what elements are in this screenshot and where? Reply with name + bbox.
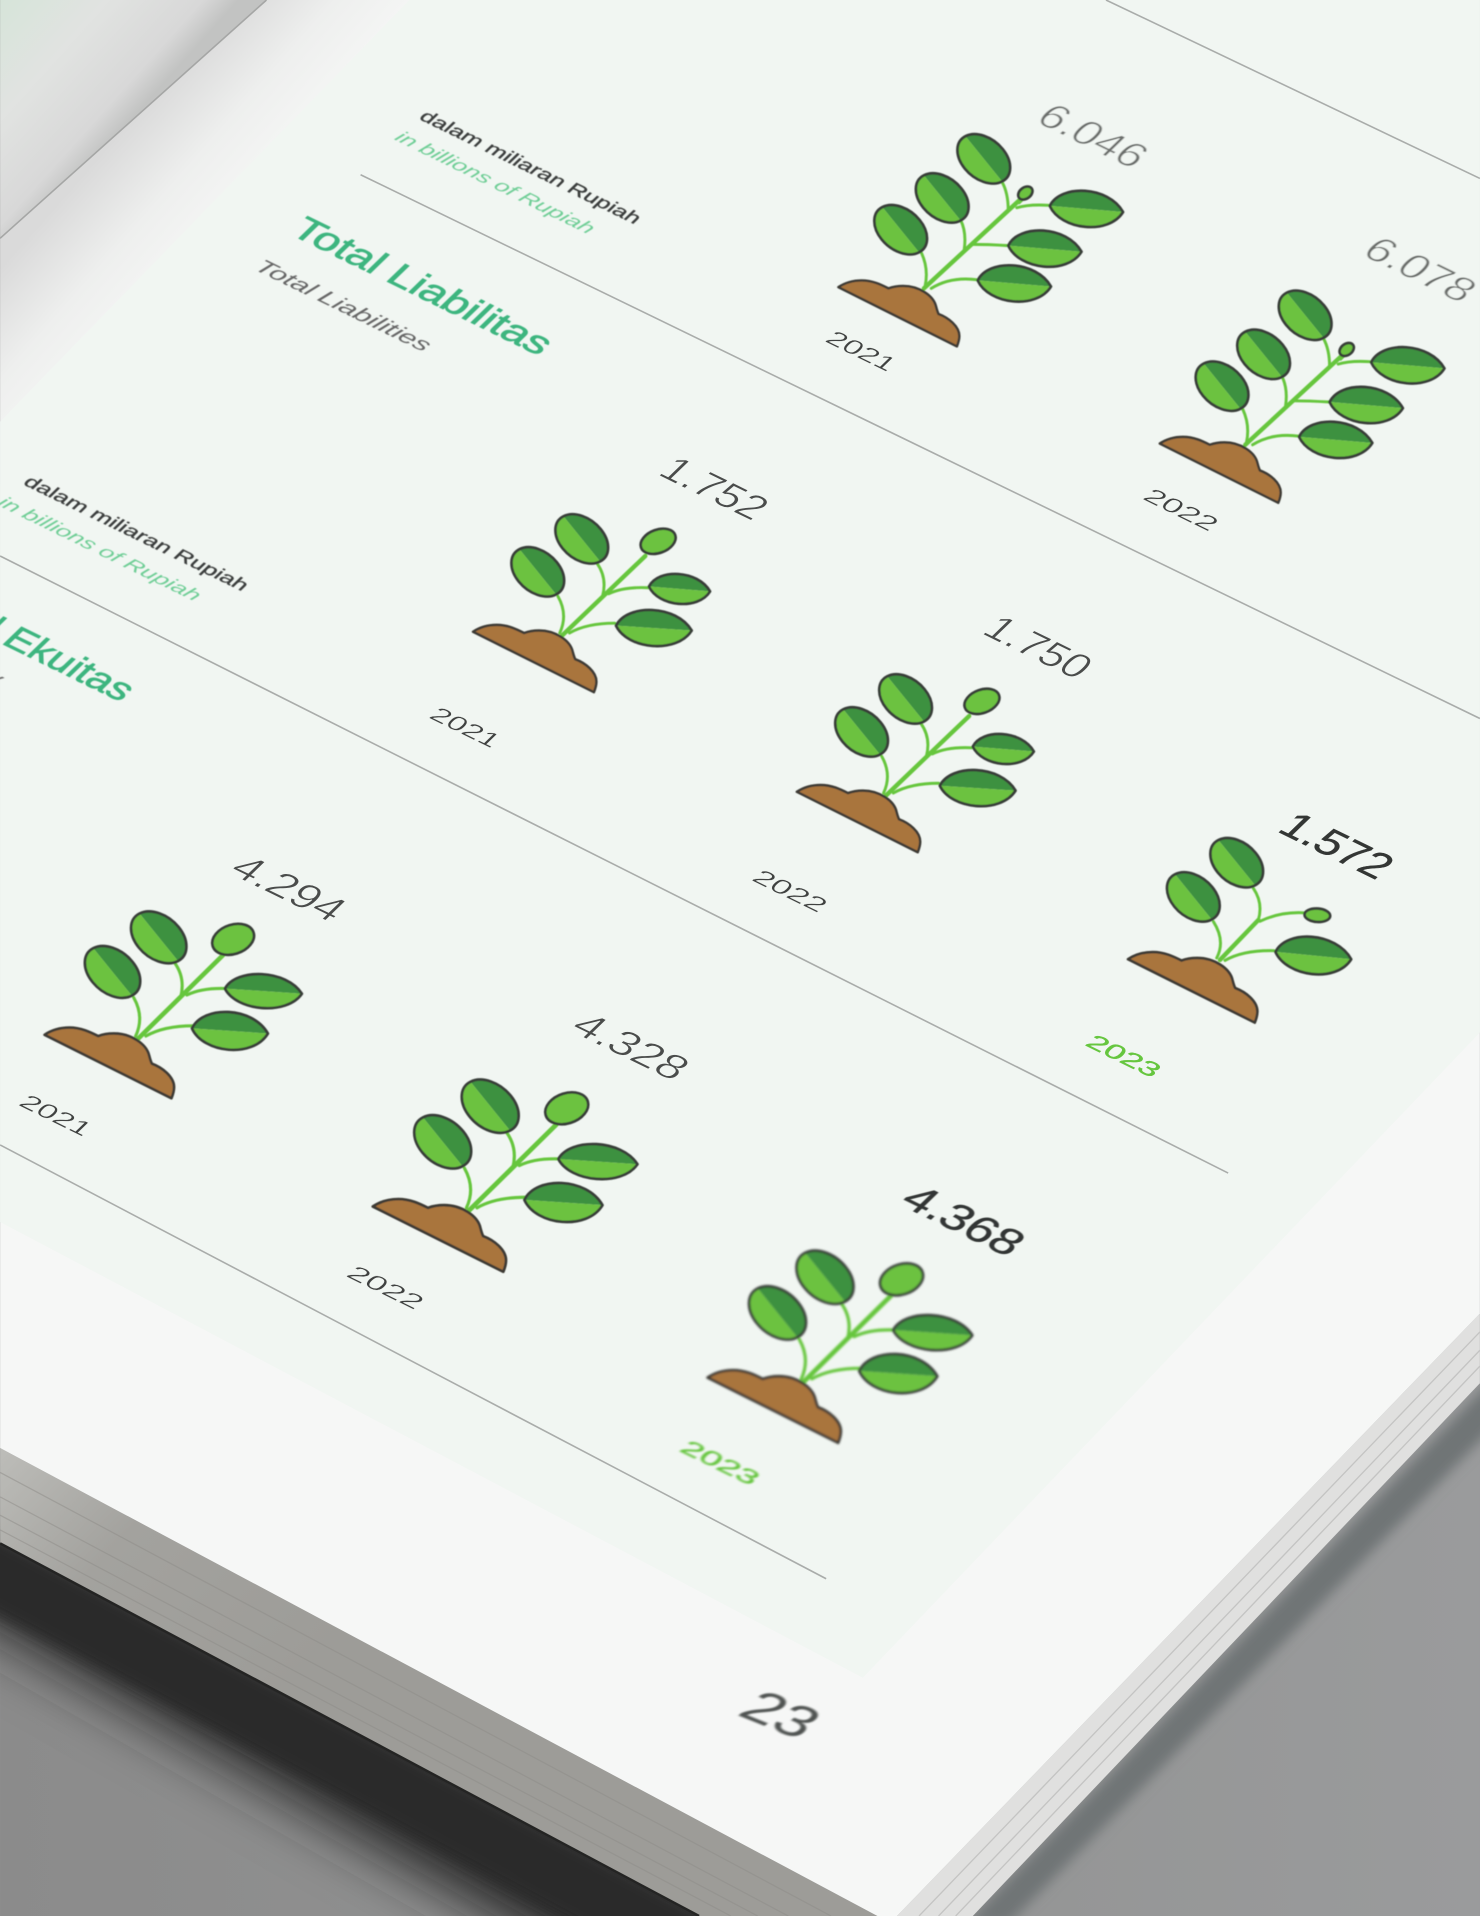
page stack: dark bottom line [0, 1543, 699, 1916]
contact shadow under page block [0, 1497, 782, 1916]
plant: aset 2022 [373, 1071, 637, 1272]
year: 2023 aset: 2023 [674, 1436, 765, 1490]
page stack: right edge [897, 1314, 1480, 1916]
left facing page [0, 0, 266, 238]
plant: aset 2021 [45, 903, 302, 1098]
unit label: dalam miliaran rupiah: dalam miliaran Rupiah [415, 108, 646, 228]
plant: liabilitas 2021 [838, 126, 1123, 346]
value: 1.572: 1.572 [1269, 805, 1404, 887]
value: 6.046: 6.046 [1027, 97, 1158, 176]
page stack: right edge shadow [965, 1375, 1480, 1916]
plant: liabilitas 2022 [1160, 283, 1444, 503]
section: total ekuitas labels [0, 473, 253, 708]
value: 4.294: 4.294 [221, 848, 356, 929]
subheading: total liabilities: Total Liabilities [250, 255, 438, 356]
value: 4.368: 4.368 [892, 1177, 1035, 1264]
plant: ekuitas 2023 [1128, 830, 1351, 1023]
plant: ekuitas 2022 [797, 667, 1034, 852]
shadow under book [0, 1454, 807, 1916]
page number: 23 [727, 1682, 833, 1748]
section: total liabilitas labels [250, 108, 646, 362]
year: 2022 ekuitas: 2022 [746, 866, 833, 917]
plant: ekuitas 2021 [473, 506, 710, 692]
year: 2021 liabilitas: 2021 [820, 327, 902, 376]
unit label 2: dalam miliaran rupiah: dalam miliaran Rupiah [19, 473, 253, 595]
value: 1.750: 1.750 [973, 609, 1102, 687]
year: 2022 aset: 2022 [341, 1262, 430, 1314]
heading: total liabilitas: Total Liabilitas [283, 211, 562, 362]
plant: aset 2023 [708, 1242, 972, 1443]
year: 2021 aset: 2021 [13, 1091, 98, 1141]
value: 1.752: 1.752 [650, 450, 778, 528]
year: 2022 liabilitas: 2022 [1137, 484, 1224, 536]
value: 4.328: 4.328 [562, 1006, 699, 1088]
page stack: bottom edge [0, 1448, 877, 1916]
unit label: in billions of rupiah: in billions of Rupiah [390, 128, 600, 238]
gutter line [0, 0, 266, 238]
year: 2023 ekuitas: 2023 [1080, 1031, 1167, 1082]
year: 2021 ekuitas: 2021 [424, 703, 506, 752]
page stack: stripes [0, 1472, 831, 1916]
